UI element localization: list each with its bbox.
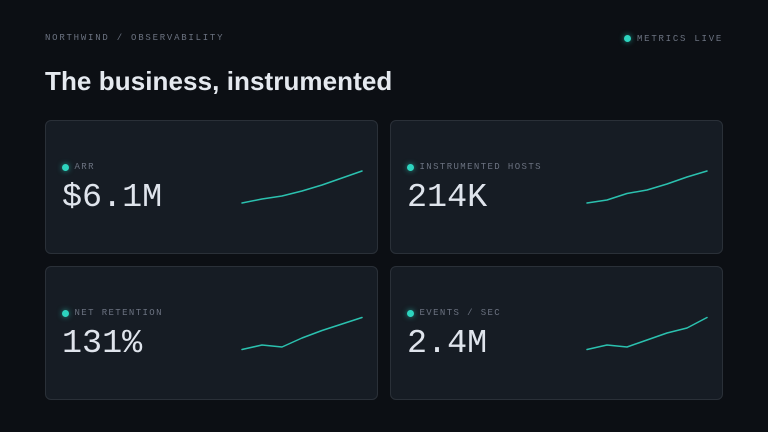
label: ARR: ARR bbox=[74, 162, 95, 172]
value: events per second: 2.4M bbox=[407, 325, 487, 363]
sparkline: hosts trend bbox=[586, 170, 708, 204]
icon: ARR status dot bbox=[62, 164, 68, 170]
label: net retention: NET RETENTION bbox=[74, 308, 163, 318]
status text: METRICS LIVE bbox=[637, 34, 723, 44]
value: net retention: 131% bbox=[62, 325, 142, 363]
panel: ARR bbox=[45, 120, 378, 254]
label: instrumented hosts: INSTRUMENTED HOSTS bbox=[420, 162, 542, 172]
value: ARR: $6.1M bbox=[62, 179, 162, 217]
icon: events status dot bbox=[406, 310, 414, 316]
eyebrow: brand and section: NORTHWIND / OBSERVABILITY bbox=[45, 33, 224, 43]
icon: retention status dot bbox=[62, 310, 68, 316]
panel: instrumented hosts bbox=[390, 120, 723, 254]
panel: net retention bbox=[45, 266, 378, 400]
sparkline: events trend bbox=[586, 316, 708, 350]
icon: live status dot bbox=[624, 35, 631, 42]
value: instrumented hosts: 214K bbox=[407, 179, 487, 217]
panel: events per second bbox=[390, 266, 723, 400]
icon: hosts status dot bbox=[406, 164, 414, 170]
label: events per second: EVENTS / SEC bbox=[420, 308, 501, 318]
title: The business, instrumented bbox=[45, 66, 392, 96]
status: metrics live bbox=[620, 32, 723, 46]
sparkline: ARR trend bbox=[241, 170, 363, 204]
sparkline: retention trend bbox=[241, 316, 363, 350]
